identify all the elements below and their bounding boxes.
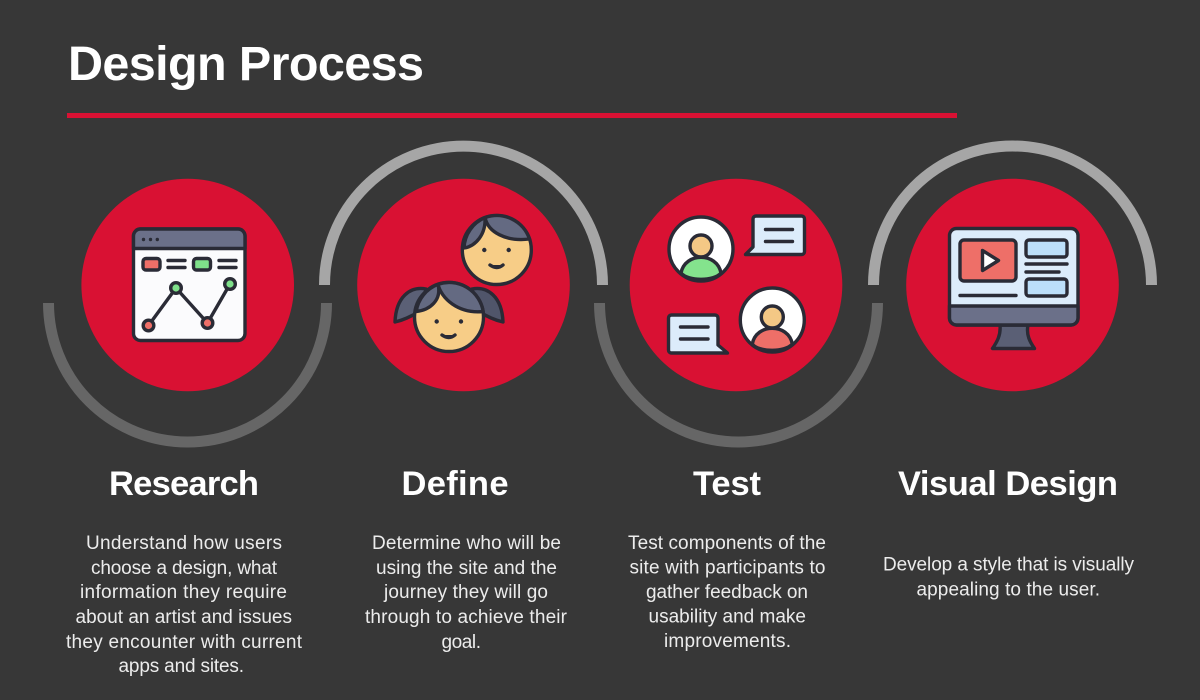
- title underline: [67, 113, 957, 118]
- text: research description: choose a design, what: [91, 558, 278, 579]
- circle: test: [630, 179, 842, 391]
- text: test description: site with participants to: [630, 558, 826, 578]
- text: define description: [365, 533, 568, 653]
- text: define description: using the site and the: [376, 558, 557, 579]
- step: define: [365, 465, 568, 653]
- heading: test: Test: [693, 465, 762, 503]
- circle: define: [357, 179, 570, 391]
- text: research description: about an artist and issues: [76, 607, 292, 628]
- heading: research: Research: [109, 465, 259, 503]
- step: research: [66, 465, 303, 677]
- text: define description: Determine who will be: [372, 533, 561, 554]
- text: test description: gather feedback on: [646, 582, 808, 603]
- circle: visual design: [906, 179, 1119, 391]
- chat bubble top: [746, 216, 804, 254]
- boy face: [462, 216, 531, 284]
- heading: define: Define: [402, 465, 508, 503]
- text: research description: they encounter with current: [66, 632, 303, 653]
- text: test description: usability and make: [648, 606, 806, 628]
- icon: monitor with video player: [950, 228, 1078, 348]
- title: Design Process: [68, 37, 424, 91]
- arc: visual design top: [874, 146, 1152, 285]
- text: research description: [66, 533, 303, 677]
- arc: test bottom: [600, 303, 878, 442]
- text: define description: journey they will go: [383, 582, 548, 603]
- chat bubble bottom: [668, 315, 728, 353]
- text: research description: Understand how users: [86, 533, 282, 554]
- text: test description: improvements.: [664, 631, 791, 652]
- text: test description: Test components of the: [628, 533, 826, 554]
- girl face with pigtails: [395, 282, 503, 352]
- step: visual design: [883, 465, 1134, 600]
- user avatar green: [669, 217, 733, 281]
- text: research description: information they require: [80, 582, 287, 603]
- text: define description: goal.: [442, 632, 481, 653]
- arc: define top: [324, 146, 602, 285]
- circle: research: [81, 179, 294, 391]
- monitor stand: [992, 325, 1034, 348]
- arc: research bottom: [48, 303, 326, 442]
- text: visual design description: [883, 554, 1134, 600]
- heading: visual design: Visual Design: [898, 465, 1118, 503]
- monitor screen: [950, 228, 1078, 325]
- icon: two children faces: [395, 216, 531, 352]
- icon: users with chat bubbles: [668, 216, 804, 353]
- icon: browser window with line chart: [134, 229, 245, 340]
- step: test: [628, 465, 826, 652]
- user avatar red: [740, 288, 804, 352]
- text: research description: apps and sites.: [118, 656, 244, 677]
- text: define description: through to achieve their: [365, 607, 568, 628]
- text: test description: [628, 533, 826, 652]
- text: visual design description: Develop a style that is visually: [883, 554, 1134, 576]
- text: visual design description: appealing to the user.: [916, 580, 1100, 600]
